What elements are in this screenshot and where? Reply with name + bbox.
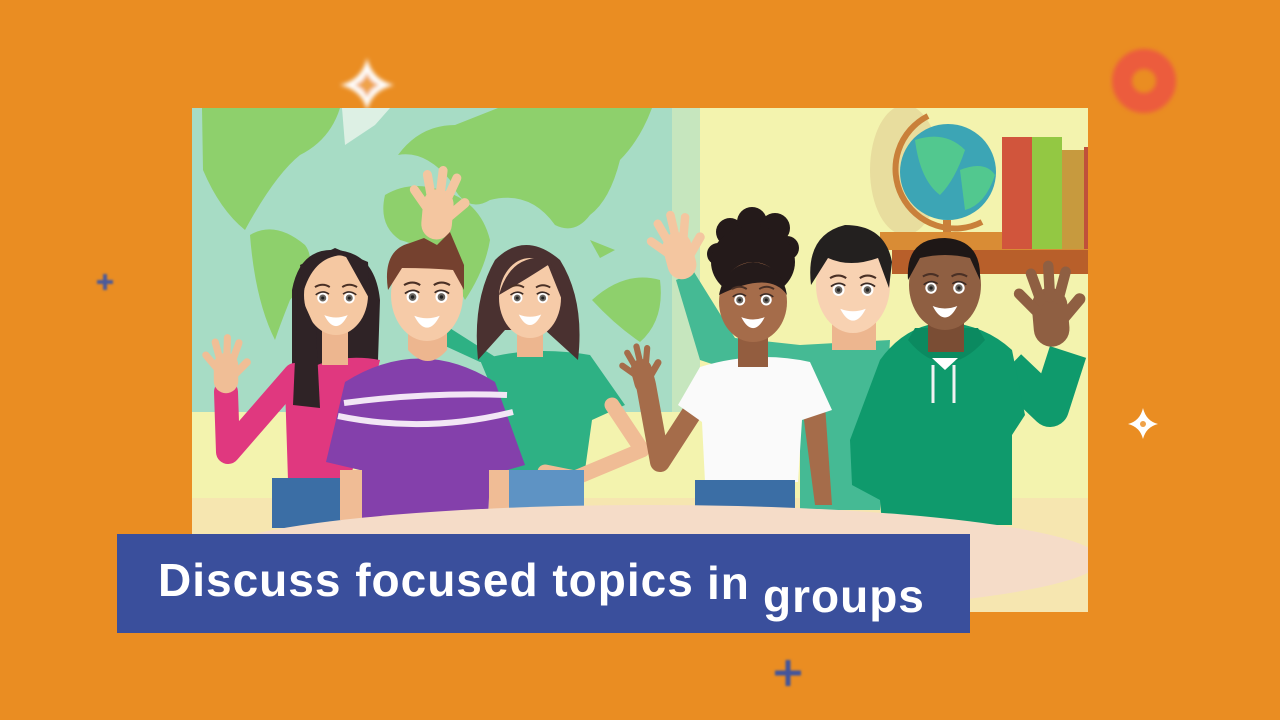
person: man at back in mint: [646, 209, 892, 510]
person: woman in green tee: [411, 168, 642, 510]
curly hair: [707, 207, 799, 286]
bookshelf: [880, 137, 1088, 274]
person: man in purple: [326, 232, 525, 520]
caption text: groups: [763, 570, 925, 622]
person: man in green hoodie: [850, 238, 1082, 525]
floor: [192, 498, 1088, 612]
icon: white sparkle top: [340, 58, 394, 110]
classroom wall: [192, 108, 1088, 498]
globe: [870, 105, 996, 235]
table: [254, 505, 1088, 598]
caption text: Discuss focused topics: [158, 554, 694, 606]
world map board: [192, 108, 700, 412]
caption text: in: [707, 557, 750, 609]
person: woman in white: [618, 207, 832, 515]
icon: blue plus left: [97, 274, 113, 290]
illustration: classroom with students: [192, 105, 1100, 615]
caption banner: [117, 534, 970, 633]
icon: blue plus bottom: [775, 660, 801, 686]
icon: white sparkle right: [1128, 408, 1158, 439]
icon: red ring: [1122, 59, 1166, 103]
person: woman in pink: [206, 248, 380, 528]
